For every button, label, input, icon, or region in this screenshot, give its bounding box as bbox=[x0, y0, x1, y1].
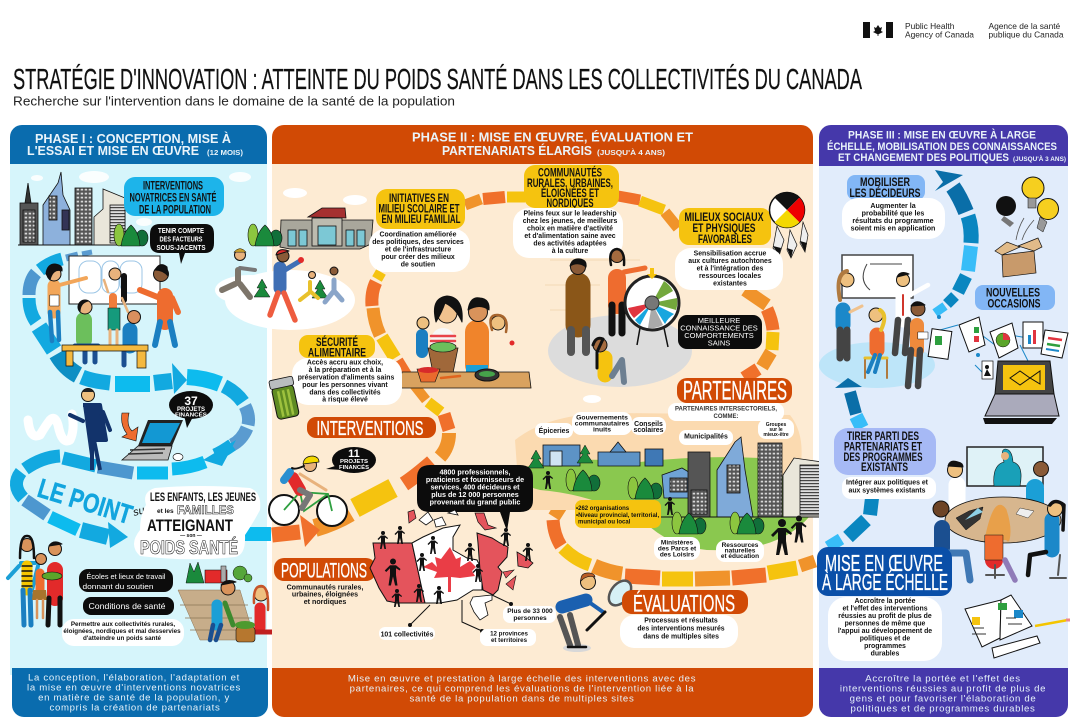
callout: plus de 33 000: Plus de 33 000 bbox=[507, 608, 553, 615]
phase I header: PHASE I : CONCEPTION, MISE À bbox=[35, 131, 231, 146]
callout: mobiliser bbox=[847, 175, 925, 200]
text block: sensibilisation: et à l'intégration des bbox=[697, 266, 764, 272]
heading: interventions bbox=[307, 417, 436, 440]
speech bubble: facteurs sous-jacents bbox=[150, 224, 214, 264]
labels: ministères, ressources: Ressources bbox=[722, 542, 759, 549]
path: orange trail bbox=[272, 196, 815, 579]
phase III footer: gens et pour favoriser l'élaboration de bbox=[850, 694, 1036, 704]
phase III footer: politiques et de programmes durables bbox=[850, 704, 1036, 714]
speech bubble: 11 projets bbox=[326, 447, 376, 473]
callout: interventions novatrices: DE LA POPULATION bbox=[139, 204, 211, 216]
trees bbox=[114, 224, 148, 246]
text block: pleins feux: choix en matière d'activité bbox=[527, 226, 613, 232]
badge: les enfants, les jeunes et les familles atteignant son poids santé bbox=[134, 486, 260, 559]
text block: intégrer: aux systèmes existants bbox=[848, 488, 926, 494]
callout: nouvelles occasions bbox=[975, 285, 1055, 310]
label: écoles et lieux de travail: Écoles et lieux de travail bbox=[86, 572, 166, 581]
trees: by school bbox=[248, 224, 282, 246]
label: meilleure connaissance: SAINS bbox=[708, 338, 730, 348]
panel: phase I bbox=[8, 125, 274, 717]
speech bubble: 37 projets financés: 37 bbox=[184, 394, 198, 408]
text block: accroître: politiques et de bbox=[860, 636, 910, 642]
path: blue trail, upper bbox=[29, 252, 249, 445]
person: woman in green skirt bbox=[104, 268, 128, 345]
callout: mise en œuvre à large échelle: À LARGE ÉCHELLE bbox=[822, 569, 948, 595]
panel: phase III bbox=[817, 125, 1070, 717]
labels: ministères, ressources: naturelles bbox=[725, 548, 756, 554]
phase III header: ET CHANGEMENT DES POLITIQUES bbox=[838, 152, 1009, 164]
logo: Government of Canada: Agency of Canada bbox=[905, 30, 974, 40]
icon: light bulbs and box bbox=[995, 177, 1058, 277]
label: 262 organisations bbox=[575, 500, 661, 528]
illustration: cyclist bbox=[269, 456, 347, 526]
callout: mise en œuvre à large échelle: MISE EN ŒUVRE bbox=[825, 550, 943, 576]
speech bubble: 37 projets financés bbox=[169, 391, 213, 428]
icon: dollar arrow bbox=[122, 413, 138, 441]
label: meilleure connaissance: MEILLEURE bbox=[698, 316, 740, 325]
labels: partner types bbox=[535, 412, 794, 445]
callout: mobiliser: LES DÉCIDEURS bbox=[850, 187, 921, 200]
text block: sensibilisation: ressources locales bbox=[699, 273, 761, 280]
person: woman pointing bbox=[46, 264, 86, 341]
callout: initiatives: MILIEU SCOLAIRE ET bbox=[378, 204, 460, 216]
callout: sécurité alimentaire: ALIMENTAIRE bbox=[308, 348, 366, 360]
callout: tirer parti bbox=[834, 428, 936, 475]
callout: milieux: ET PHYSIQUES bbox=[692, 223, 756, 235]
callout: nouvelles occasions: NOUVELLES bbox=[986, 288, 1040, 300]
text block: sensibilisation: Sensibilisation accrue bbox=[694, 250, 767, 258]
text block: augmenter: résultats du programme bbox=[852, 217, 934, 225]
labels: ministères, ressources: et éducation bbox=[721, 553, 759, 560]
trees: community bbox=[528, 445, 764, 534]
text block: accroître: réussies au profit de plus de bbox=[838, 613, 932, 620]
label: meilleure connaissance: CONNAISSANCE DES bbox=[680, 324, 758, 332]
speech bubble: 37 projets financés: PROJETS bbox=[177, 407, 205, 413]
person: brown coat bbox=[570, 259, 586, 352]
text block: pleins feux: à la culture bbox=[552, 248, 588, 255]
text block: accès accru: à risque élevé bbox=[322, 396, 368, 404]
text block: augmenter bbox=[842, 198, 945, 239]
text block: pleins feux: Pleins feux sur le leadership bbox=[523, 210, 617, 218]
callout: 12 provinces bbox=[462, 600, 536, 646]
icon: laptop bbox=[122, 420, 183, 460]
callout: initiatives: INITIATIVES EN bbox=[389, 193, 449, 205]
callout: tirer parti: EXISTANTS bbox=[861, 462, 908, 474]
label: 262 organisations: •Niveau provincial, territorial, bbox=[576, 513, 659, 519]
panel: phase II bbox=[215, 125, 825, 717]
callout: plus de 33 000: personnes bbox=[513, 615, 547, 622]
label: écoles et lieux de travail bbox=[79, 569, 173, 592]
people around table bbox=[948, 461, 1048, 505]
illustration: runners on snow bbox=[215, 248, 355, 330]
text block: coordination bbox=[369, 229, 470, 272]
icon: medicine wheel and feathers bbox=[770, 192, 808, 258]
callout: initiatives: EN MILIEU FAMILIAL bbox=[382, 214, 460, 226]
text block: permettre aux collectivités: Permettre aux collectivités rurales, bbox=[71, 621, 175, 628]
heading: partenaires: PARTENAIRES bbox=[683, 376, 787, 406]
figures: community bbox=[542, 471, 806, 555]
phase I header: L'ESSAI ET MISE EN ŒUVRE bbox=[27, 144, 199, 158]
phase II header: PHASE II : MISE EN ŒUVRE, ÉVALUATION ET bbox=[412, 130, 693, 144]
phase III footer: Accroître la portée et l'effet des bbox=[865, 674, 1021, 684]
text block: accroître: l'appui au développement de bbox=[838, 628, 932, 635]
phase III header bbox=[819, 125, 1068, 166]
text block: coordination: Coordination améliorée bbox=[380, 232, 457, 238]
callout: mobiliser: MOBILISER bbox=[860, 177, 911, 189]
illustration: family bbox=[8, 536, 62, 625]
illustration: video meeting bbox=[933, 447, 1066, 580]
heading: partenaires bbox=[677, 376, 792, 406]
speech bubble: 11 projets: FINANCÉS bbox=[339, 463, 369, 471]
speech bubble: facteurs sous-jacents: SOUS-JACENTS bbox=[156, 245, 206, 252]
labels: partner types: Municipalités bbox=[684, 434, 728, 440]
speech bubble: 4 800 professionnels: plus de 12 000 personnes bbox=[431, 490, 519, 499]
text: sur: sur bbox=[132, 503, 151, 519]
clouds: sky bbox=[283, 188, 367, 205]
text block: augmenter: probabilité que les bbox=[862, 210, 924, 218]
illustration: city skyline bbox=[18, 172, 127, 245]
text block: processus bbox=[620, 615, 738, 648]
labels: partner types: scolaires bbox=[634, 427, 664, 434]
icon: jar of pickles bbox=[269, 376, 300, 420]
speech bubble: 4 800 professionnels: provenant du grand public bbox=[430, 498, 520, 506]
phase III footer bbox=[819, 668, 1068, 717]
phase II header: (JUSQU'À 4 ANS) bbox=[597, 148, 665, 157]
labels: partner types: communautaires bbox=[575, 420, 629, 428]
ellipse floor bbox=[819, 342, 935, 388]
heading: évaluations: ÉVALUATIONS bbox=[633, 590, 735, 618]
text block: intégrer bbox=[842, 477, 936, 499]
phase I footer bbox=[12, 668, 268, 717]
phase II footer: santé de la population dans de multiples sites bbox=[410, 694, 634, 704]
phase I footer: La conception, l'élaboration, l'adaptation et bbox=[28, 672, 240, 684]
illustration: open book, pencil and scroll bbox=[965, 595, 1070, 658]
person: seated blue bbox=[124, 310, 140, 365]
text block: sensibilisation: existantes bbox=[713, 280, 747, 288]
text block: accès accru: à la préparation et à la bbox=[309, 367, 382, 374]
text block: processus: des interventions mesurés bbox=[637, 626, 725, 632]
phase III header: PHASE III : MISE EN ŒUVRE À LARGE bbox=[848, 128, 1036, 142]
text block: accès accru: dans des collectivités bbox=[309, 390, 381, 396]
text block: accès accru: pour les personnes vivant bbox=[302, 382, 388, 389]
text block: accroître: durables bbox=[871, 650, 900, 658]
badge: les enfants, les jeunes et les familles atteignant son poids santé: et les bbox=[157, 508, 174, 515]
text block: accroître: et l'effet des interventions bbox=[842, 606, 928, 612]
callout: 101 collectivités: 101 collectivités bbox=[381, 632, 434, 638]
bench bbox=[62, 345, 148, 368]
labels: ministères, ressources: Ministères bbox=[661, 540, 693, 546]
callout: communautés: COMMUNAUTÉS bbox=[538, 166, 602, 180]
callout: tirer parti: TIRER PARTI DES bbox=[847, 431, 919, 443]
chart: Canada map flag bbox=[370, 510, 533, 620]
text block: accroître: programmes bbox=[864, 643, 906, 650]
label: 262 organisations: •262 organisations bbox=[576, 506, 630, 512]
callout: communautés: RURALES, URBAINES, bbox=[527, 178, 613, 190]
person: seated woman bbox=[865, 308, 887, 378]
speech bubble: facteurs sous-jacents: DES FACTEURS bbox=[160, 236, 203, 244]
labels: partner types: Groupes bbox=[766, 422, 786, 428]
callout: plus de 33 000 bbox=[492, 595, 556, 623]
logo: Government of Canada bbox=[863, 21, 1064, 40]
cutting board bbox=[399, 372, 531, 388]
text block: accroître: personnes de même que bbox=[845, 620, 926, 628]
labels: partner types: Gouvernements bbox=[576, 414, 628, 422]
person: seated in yellow bbox=[593, 338, 624, 382]
text block: sensibilisation: aux cultures autochtones bbox=[688, 258, 772, 265]
subtitle: Recherche sur l'intervention dans le domaine de la santé de la population bbox=[13, 94, 455, 108]
badge: les enfants, les jeunes et les familles atteignant son poids santé: LES ENFANTS, LES JEUNES bbox=[150, 490, 256, 504]
callout: communautés: ÉLOIGNÉES ET bbox=[541, 187, 599, 200]
phase I header: (12 MOIS) bbox=[207, 150, 243, 157]
callout: communautés: NORDIQUES bbox=[546, 198, 594, 210]
logo: Government of Canada: Public Health bbox=[905, 21, 955, 31]
logo: Government of Canada: publique du Canada bbox=[988, 30, 1064, 40]
callout: milieux: MILIEUX SOCIAUX bbox=[684, 212, 764, 224]
heading: populations bbox=[274, 558, 376, 582]
speech bubble: 11 projets: 11 bbox=[348, 448, 360, 460]
community background bbox=[515, 413, 802, 510]
text block: accès accru: préservation d'aliments sains bbox=[298, 374, 394, 382]
text block: coordination: des politiques, des services bbox=[372, 239, 464, 246]
speech bubble: 4 800 professionnels: 4800 professionnels, bbox=[439, 468, 511, 476]
path: lower blue arrow bbox=[828, 378, 872, 547]
callout: 101 collectivités bbox=[379, 605, 435, 640]
clouds: sky bbox=[31, 171, 251, 226]
text: populations description: Communautés rurales, bbox=[287, 584, 363, 592]
person: man with vegetables bbox=[210, 581, 236, 640]
person: woman in blue bbox=[839, 271, 862, 358]
person: man in orange bbox=[140, 265, 178, 345]
callout: nouvelles occasions: OCCASIONS bbox=[988, 298, 1041, 310]
callout: mise en œuvre à large échelle bbox=[817, 547, 952, 596]
text: partenaires intersectoriels: PARTENAIRES INTERSECTORIELS, bbox=[675, 406, 777, 412]
person: woman with basket bbox=[235, 586, 274, 642]
phase II footer bbox=[272, 668, 813, 717]
phase I header bbox=[10, 125, 267, 164]
labels: partner types: sur le bbox=[769, 427, 783, 433]
path: blue arrow upward bbox=[935, 170, 971, 313]
callout: interventions novatrices: INTERVENTIONS bbox=[143, 180, 203, 192]
callout: communautés bbox=[524, 165, 619, 210]
round table bbox=[945, 497, 1061, 543]
text block: coordination: pour créer des milieux bbox=[381, 254, 455, 261]
callout: interventions novatrices bbox=[124, 177, 224, 216]
illustration: community buildings bbox=[543, 437, 825, 517]
label: meilleure connaissance bbox=[678, 315, 762, 349]
text block: pleins feux bbox=[513, 208, 623, 258]
labels: partner types: Épiceries bbox=[539, 426, 569, 435]
illustration: man with magnifier bbox=[560, 573, 636, 652]
labels: partner types: inuits bbox=[593, 426, 611, 434]
text block: pleins feux: chez les jeunes, de meilleurs bbox=[523, 218, 617, 225]
text block: coordination: de soutien bbox=[401, 262, 435, 268]
cloud bbox=[583, 395, 601, 403]
people running bbox=[222, 248, 342, 320]
phase I footer: la mise en œuvre d'interventions novatrices bbox=[27, 682, 241, 694]
illustration: whiteboard and team bbox=[839, 255, 928, 386]
text block: accroître bbox=[828, 597, 942, 661]
badge: les enfants, les jeunes et les familles atteignant son poids santé: FAMILLES bbox=[177, 503, 234, 517]
callout: milieux: FAVORABLES bbox=[698, 234, 752, 246]
speech bubble: 11 projets: PROJETS bbox=[340, 459, 368, 465]
callout: interventions novatrices: NOVATRICES EN SANTÉ bbox=[130, 192, 217, 204]
text block: pleins feux: et d'alimentation saine avec bbox=[524, 233, 616, 240]
phase III header: (JUSQU'À 3 ANS) bbox=[1013, 154, 1066, 163]
text block: permettre aux collectivités: d'atteindre un poids santé bbox=[83, 635, 162, 642]
labels: ministères, ressources: des Parcs et bbox=[658, 546, 697, 552]
phase II header: PARTENARIATS ÉLARGIS bbox=[442, 143, 592, 158]
text block: coordination: et de l'infrastructure bbox=[385, 246, 451, 254]
callout: initiatives bbox=[376, 189, 465, 229]
speech bubble: 4 800 professionnels: praticiens et fournisseurs de bbox=[426, 475, 524, 484]
basket bbox=[428, 348, 458, 373]
labels: partner types: mieux-être bbox=[763, 432, 789, 438]
text block: accès accru bbox=[292, 358, 402, 405]
callout: tirer parti: DES PROGRAMMES bbox=[844, 452, 923, 464]
phase III footer: interventions réussies au profit de plus de bbox=[840, 684, 1046, 694]
heading: interventions: INTERVENTIONS bbox=[316, 418, 424, 440]
text: partenaires intersectoriels: COMME: bbox=[714, 414, 738, 420]
callout: 12 provinces: et territoires bbox=[491, 637, 528, 644]
text: partenaires intersectoriels bbox=[668, 403, 784, 421]
text block: sensibilisation bbox=[675, 248, 783, 290]
text block: intégrer: Intégrer aux politiques et bbox=[846, 480, 929, 486]
figures on map bbox=[378, 526, 533, 607]
illustration: school bbox=[280, 208, 373, 249]
label: meilleure connaissance: COMPORTEMENTS bbox=[684, 331, 754, 340]
labels: partner types: Conseils bbox=[634, 421, 663, 428]
speech bubble: 37 projets financés: FINANCÉS bbox=[175, 410, 207, 418]
label: conditions de santé: Conditions de santé bbox=[88, 602, 166, 611]
text block: pleins feux: des activités adaptées bbox=[533, 240, 607, 248]
badge: les enfants, les jeunes et les familles atteignant son poids santé: ATTEIGNANT bbox=[147, 516, 233, 535]
label: conditions de santé bbox=[83, 597, 174, 615]
illustration: man with long receipt bbox=[28, 388, 110, 470]
illustration: farm bbox=[178, 562, 274, 642]
speech bubble: facteurs sous-jacents: TENIR COMPTE bbox=[158, 228, 204, 235]
text block: accès accru: Accès accru aux choix, bbox=[307, 360, 383, 366]
text block: permettre aux collectivités bbox=[62, 619, 184, 646]
person: seated green bbox=[75, 300, 98, 362]
phase I footer: compris la création de partenariats bbox=[50, 702, 220, 714]
badge: les enfants, les jeunes et les familles atteignant son poids santé: POIDS SANTÉ bbox=[140, 537, 238, 559]
phase I footer: en matière de santé de la population, y bbox=[38, 692, 230, 704]
path: blue trail, lower bbox=[16, 440, 271, 548]
person: man in orange bbox=[908, 302, 928, 386]
text block: accroître: Accroître la portée bbox=[855, 598, 916, 605]
green hills bbox=[515, 457, 818, 550]
illustration: whiteboard with team bbox=[46, 256, 178, 368]
text block: augmenter: soient mis en application bbox=[851, 224, 935, 232]
text block: processus: dans de multiples sites bbox=[643, 634, 719, 640]
phase II footer: partenaires, ce qui comprend les évaluations de l'intervention liée à la bbox=[350, 684, 694, 694]
speech bubble: 4 800 professionnels bbox=[417, 465, 533, 531]
callout: tirer parti: PARTENARIATS ET bbox=[844, 442, 922, 454]
logo: Government of Canada: Agence de la santé bbox=[988, 21, 1061, 31]
heading: évaluations bbox=[622, 590, 748, 618]
callout: 12 provinces: 12 provinces bbox=[490, 630, 528, 638]
callout: sécurité alimentaire bbox=[299, 335, 375, 360]
labels: ministères, ressources: des Loisirs bbox=[660, 552, 695, 558]
text: populations description: urbaines, éloignées bbox=[292, 590, 358, 598]
callout: milieux bbox=[679, 208, 771, 246]
person: orange top bbox=[610, 249, 645, 333]
text block: processus: Processus et résultats bbox=[644, 618, 718, 624]
game wheel bbox=[625, 268, 679, 347]
badge: les enfants, les jeunes et les familles atteignant son poids santé: — son — bbox=[180, 533, 202, 539]
heading: populations: POPULATIONS bbox=[281, 560, 367, 582]
illustration: wheel scene bbox=[545, 249, 692, 387]
text: populations description bbox=[287, 584, 363, 606]
text: populations description: et nordiques bbox=[304, 598, 346, 606]
speech bubble: 4 800 professionnels: services, 400 décideurs et bbox=[430, 482, 520, 492]
illustration: family cooking bbox=[399, 296, 531, 388]
phase II footer: Mise en œuvre et prestation à large échelle des interventions avec des bbox=[348, 674, 696, 684]
text block: augmenter: Augmenter la bbox=[870, 202, 916, 210]
laptop bbox=[995, 361, 1054, 394]
label: écoles et lieux de travail: donnant du soutien bbox=[82, 584, 154, 591]
phase II header bbox=[272, 125, 813, 164]
heading: Le point: LE POINT bbox=[34, 473, 136, 530]
labels: ministères, ressources bbox=[654, 537, 764, 562]
illustration: network of documents and laptop bbox=[928, 315, 1068, 424]
person: man with tie bbox=[884, 273, 928, 353]
label: 262 organisations: municipal ou local bbox=[578, 520, 631, 526]
callout: sécurité alimentaire: SÉCURITÉ bbox=[316, 336, 358, 349]
text block: permettre aux collectivités: éloignées, nordiques et mal desservies bbox=[63, 628, 181, 635]
